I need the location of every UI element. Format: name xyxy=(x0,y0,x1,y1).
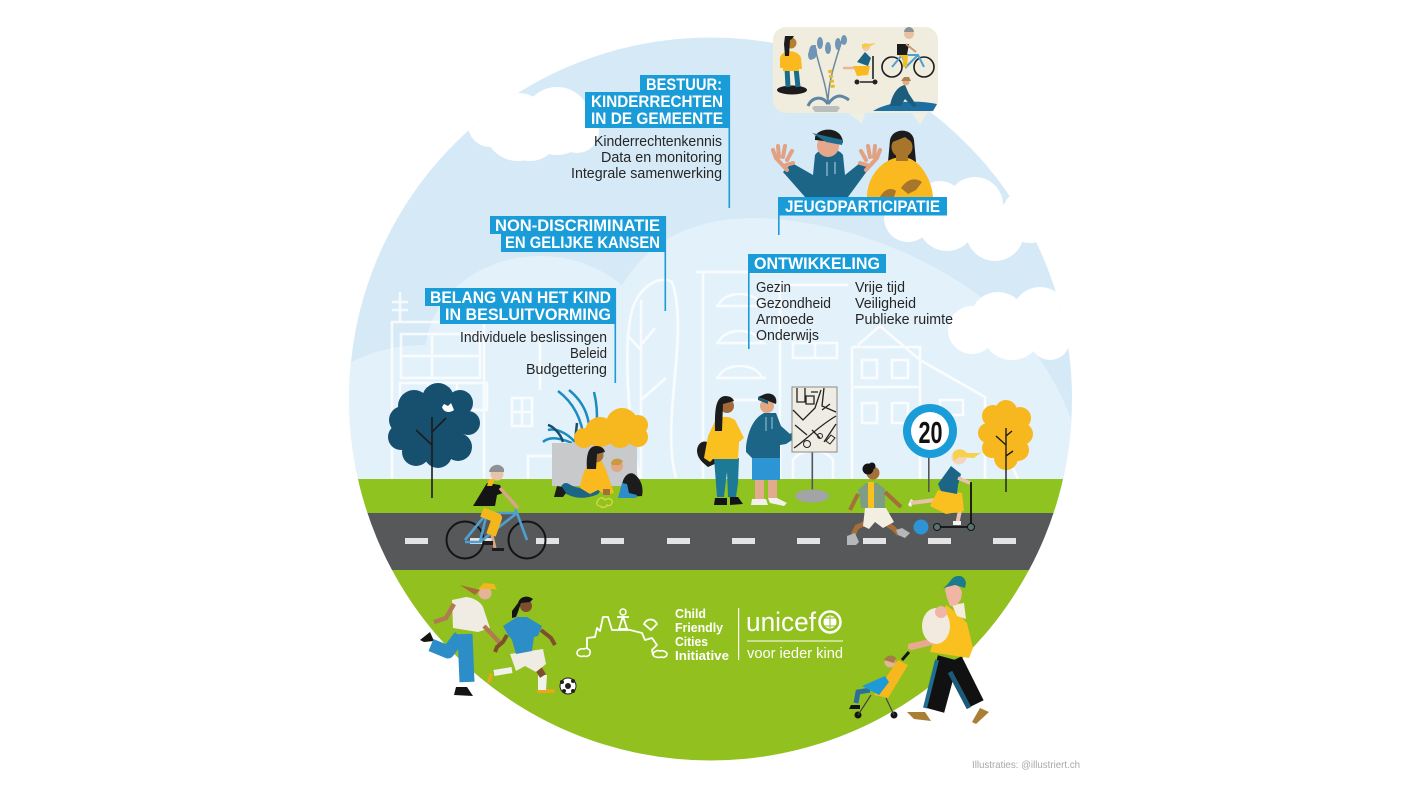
icon: kneeling person on hill xyxy=(873,77,937,111)
text: bestuur items: Kinderrechtenkennis xyxy=(594,134,722,150)
sky xyxy=(349,38,1072,420)
speech bubble with activities xyxy=(773,27,938,125)
icon: blue ball xyxy=(914,520,928,534)
text: initiative name xyxy=(675,606,729,663)
road dashes xyxy=(405,538,1016,544)
text: bestuur items: Integrale samenwerking xyxy=(571,166,722,182)
icon: skateboarder xyxy=(777,36,807,94)
text: ontwikkeling items: Veiligheid xyxy=(855,296,916,312)
icon: boy in cap xyxy=(773,130,880,197)
grass lower xyxy=(392,570,1029,760)
label: jeugdparticipatie: JEUGDPARTICIPATIE xyxy=(785,198,940,216)
icon: small scooter girl xyxy=(843,43,878,84)
text: initiative name: Friendly xyxy=(675,620,724,635)
credit: Illustraties: @illustriert.ch xyxy=(972,759,1080,771)
icon: girl playing football xyxy=(487,597,555,693)
text: belang items: Beleid xyxy=(570,346,607,362)
grass upper xyxy=(340,479,1080,515)
text: ontwikkeling items: Gezondheid xyxy=(756,296,831,312)
clouds xyxy=(468,87,1070,360)
text: initiative name: Cities xyxy=(675,634,708,649)
icon: girl kneeling xyxy=(554,446,614,507)
icon: football xyxy=(560,678,576,694)
icon: speed sign 20 xyxy=(903,404,957,492)
text: ontwikkeling items xyxy=(756,280,953,344)
icon: boy kneeling xyxy=(611,459,643,498)
label: bestuur xyxy=(585,75,730,128)
icon: child with ball xyxy=(847,462,910,545)
icon: woman running xyxy=(420,583,501,696)
label: ontwikkeling: ONTWIKKELING xyxy=(754,255,880,273)
text: belang items xyxy=(460,330,607,378)
youth figures xyxy=(773,130,933,197)
text: ontwikkeling items: Gezin xyxy=(756,280,791,296)
text: ontwikkeling items: Onderwijs xyxy=(756,328,819,344)
icon: girl on scooter xyxy=(908,449,983,530)
icon: cyclist xyxy=(446,465,546,558)
label: non-discriminatie: EN GELIJKE KANSEN xyxy=(505,234,660,252)
infographic xyxy=(349,27,1080,770)
icon: girl with crossed arms xyxy=(867,131,933,197)
icon: planter with bush xyxy=(543,390,648,486)
road xyxy=(340,513,1080,570)
text: belang items: Individuele beslissingen xyxy=(460,330,607,346)
icon: dark blue tree xyxy=(388,383,480,498)
label lines xyxy=(614,75,780,383)
text: initiative name: Child xyxy=(675,606,706,621)
label: belang van het kind: IN BESLUITVORMING xyxy=(445,306,611,324)
pale hills xyxy=(349,218,1072,479)
icon: city map board xyxy=(792,387,837,502)
logo: Child Friendly Cities Initiative xyxy=(577,606,729,663)
label: non-discriminatie xyxy=(490,216,666,252)
icon: parent with stroller xyxy=(849,576,989,724)
text: ontwikkeling items: Publieke ruimte xyxy=(855,312,953,328)
text: bestuur items xyxy=(571,134,722,182)
text: bestuur items: Data en monitoring xyxy=(601,150,722,166)
label: bestuur: IN DE GEMEENTE xyxy=(591,110,723,128)
text: belang items: Budgettering xyxy=(526,362,607,378)
label: non-discriminatie: NON-DISCRIMINATIE xyxy=(495,217,660,235)
icon: orange tree xyxy=(978,400,1033,492)
background buildings xyxy=(392,272,1018,479)
circular scene xyxy=(349,38,1072,760)
text: ontwikkeling items: Vrije tijd xyxy=(855,280,905,296)
icon: small cyclist xyxy=(882,27,934,77)
logo: unicef: unicef xyxy=(746,607,816,637)
icon: girl with skateboard xyxy=(697,396,744,505)
icon: potted plant xyxy=(808,35,849,112)
text: initiative name: Initiative xyxy=(675,648,729,663)
label: belang van het kind xyxy=(425,288,616,324)
icon: boy in hoodie xyxy=(746,393,808,506)
label: bestuur: BESTUUR: xyxy=(646,76,722,94)
label: bestuur: KINDERRECHTEN xyxy=(591,93,723,111)
label: belang van het kind: BELANG VAN HET KIND xyxy=(430,289,611,307)
logo: unicef xyxy=(738,607,843,662)
logo: unicef: voor ieder kind xyxy=(747,645,843,662)
icon: speed sign 20: 20 xyxy=(918,415,942,450)
text: ontwikkeling items: Armoede xyxy=(756,312,814,328)
